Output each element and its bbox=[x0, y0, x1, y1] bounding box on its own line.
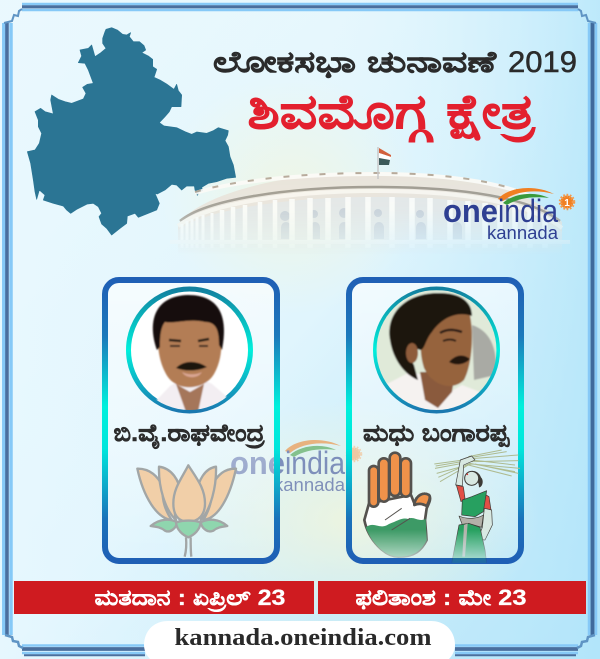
constituency heading: ಶಿವಮೊಗ್ಗ ಕ್ಷೇತ್ರ bbox=[248, 86, 535, 143]
flag on parliament bbox=[378, 147, 391, 179]
voting date bar bbox=[14, 581, 314, 614]
oneindia watermark bbox=[230, 440, 360, 495]
candidate 1 name: ಬಿ.ವೈ.ರಾಘವೇಂದ್ರ bbox=[114, 420, 265, 450]
website pill bbox=[144, 621, 455, 659]
icon: BJP lotus bbox=[137, 465, 236, 557]
title line: ಲೋಕಸಭಾ ಚುನಾವಣೆ bbox=[213, 46, 497, 79]
oneindia logo: one bbox=[443, 193, 498, 229]
oneindia watermark: kannada bbox=[274, 475, 346, 495]
results date bar: ಫಲಿತಾಂಶ : ಮೇ 23 bbox=[356, 585, 526, 610]
oneindia logo: india bbox=[498, 193, 558, 229]
candidate 2 name: ಮಧು ಬಂಗಾರಪ್ಪ bbox=[363, 420, 510, 447]
candidate 2 photo bbox=[376, 289, 498, 415]
website pill: kannada.oneindia.com bbox=[174, 625, 432, 651]
candidate 1 photo bbox=[128, 289, 250, 415]
oneindia watermark: one bbox=[230, 445, 285, 481]
panel: candidate 2 card bbox=[349, 280, 521, 563]
oneindia logo: 1 bbox=[564, 198, 570, 209]
oneindia logo bbox=[443, 188, 574, 243]
title line bbox=[213, 46, 577, 79]
results date bar bbox=[318, 581, 586, 614]
voting date bar: ಮತದಾನ : ಏಪ್ರಿಲ್ 23 bbox=[94, 585, 286, 612]
party symbols bbox=[364, 450, 520, 563]
icon: Congress hand bbox=[364, 453, 430, 557]
map of Shivamogga constituency bbox=[27, 28, 236, 235]
title line: 2019 bbox=[508, 46, 577, 79]
panel: candidate 1 card bbox=[105, 280, 277, 561]
icon: JD(S) woman with crop bbox=[434, 450, 520, 563]
oneindia watermark: india bbox=[285, 445, 345, 481]
oneindia logo: kannada bbox=[487, 223, 559, 243]
parliament building bbox=[177, 172, 570, 248]
arched windows bbox=[280, 208, 462, 239]
